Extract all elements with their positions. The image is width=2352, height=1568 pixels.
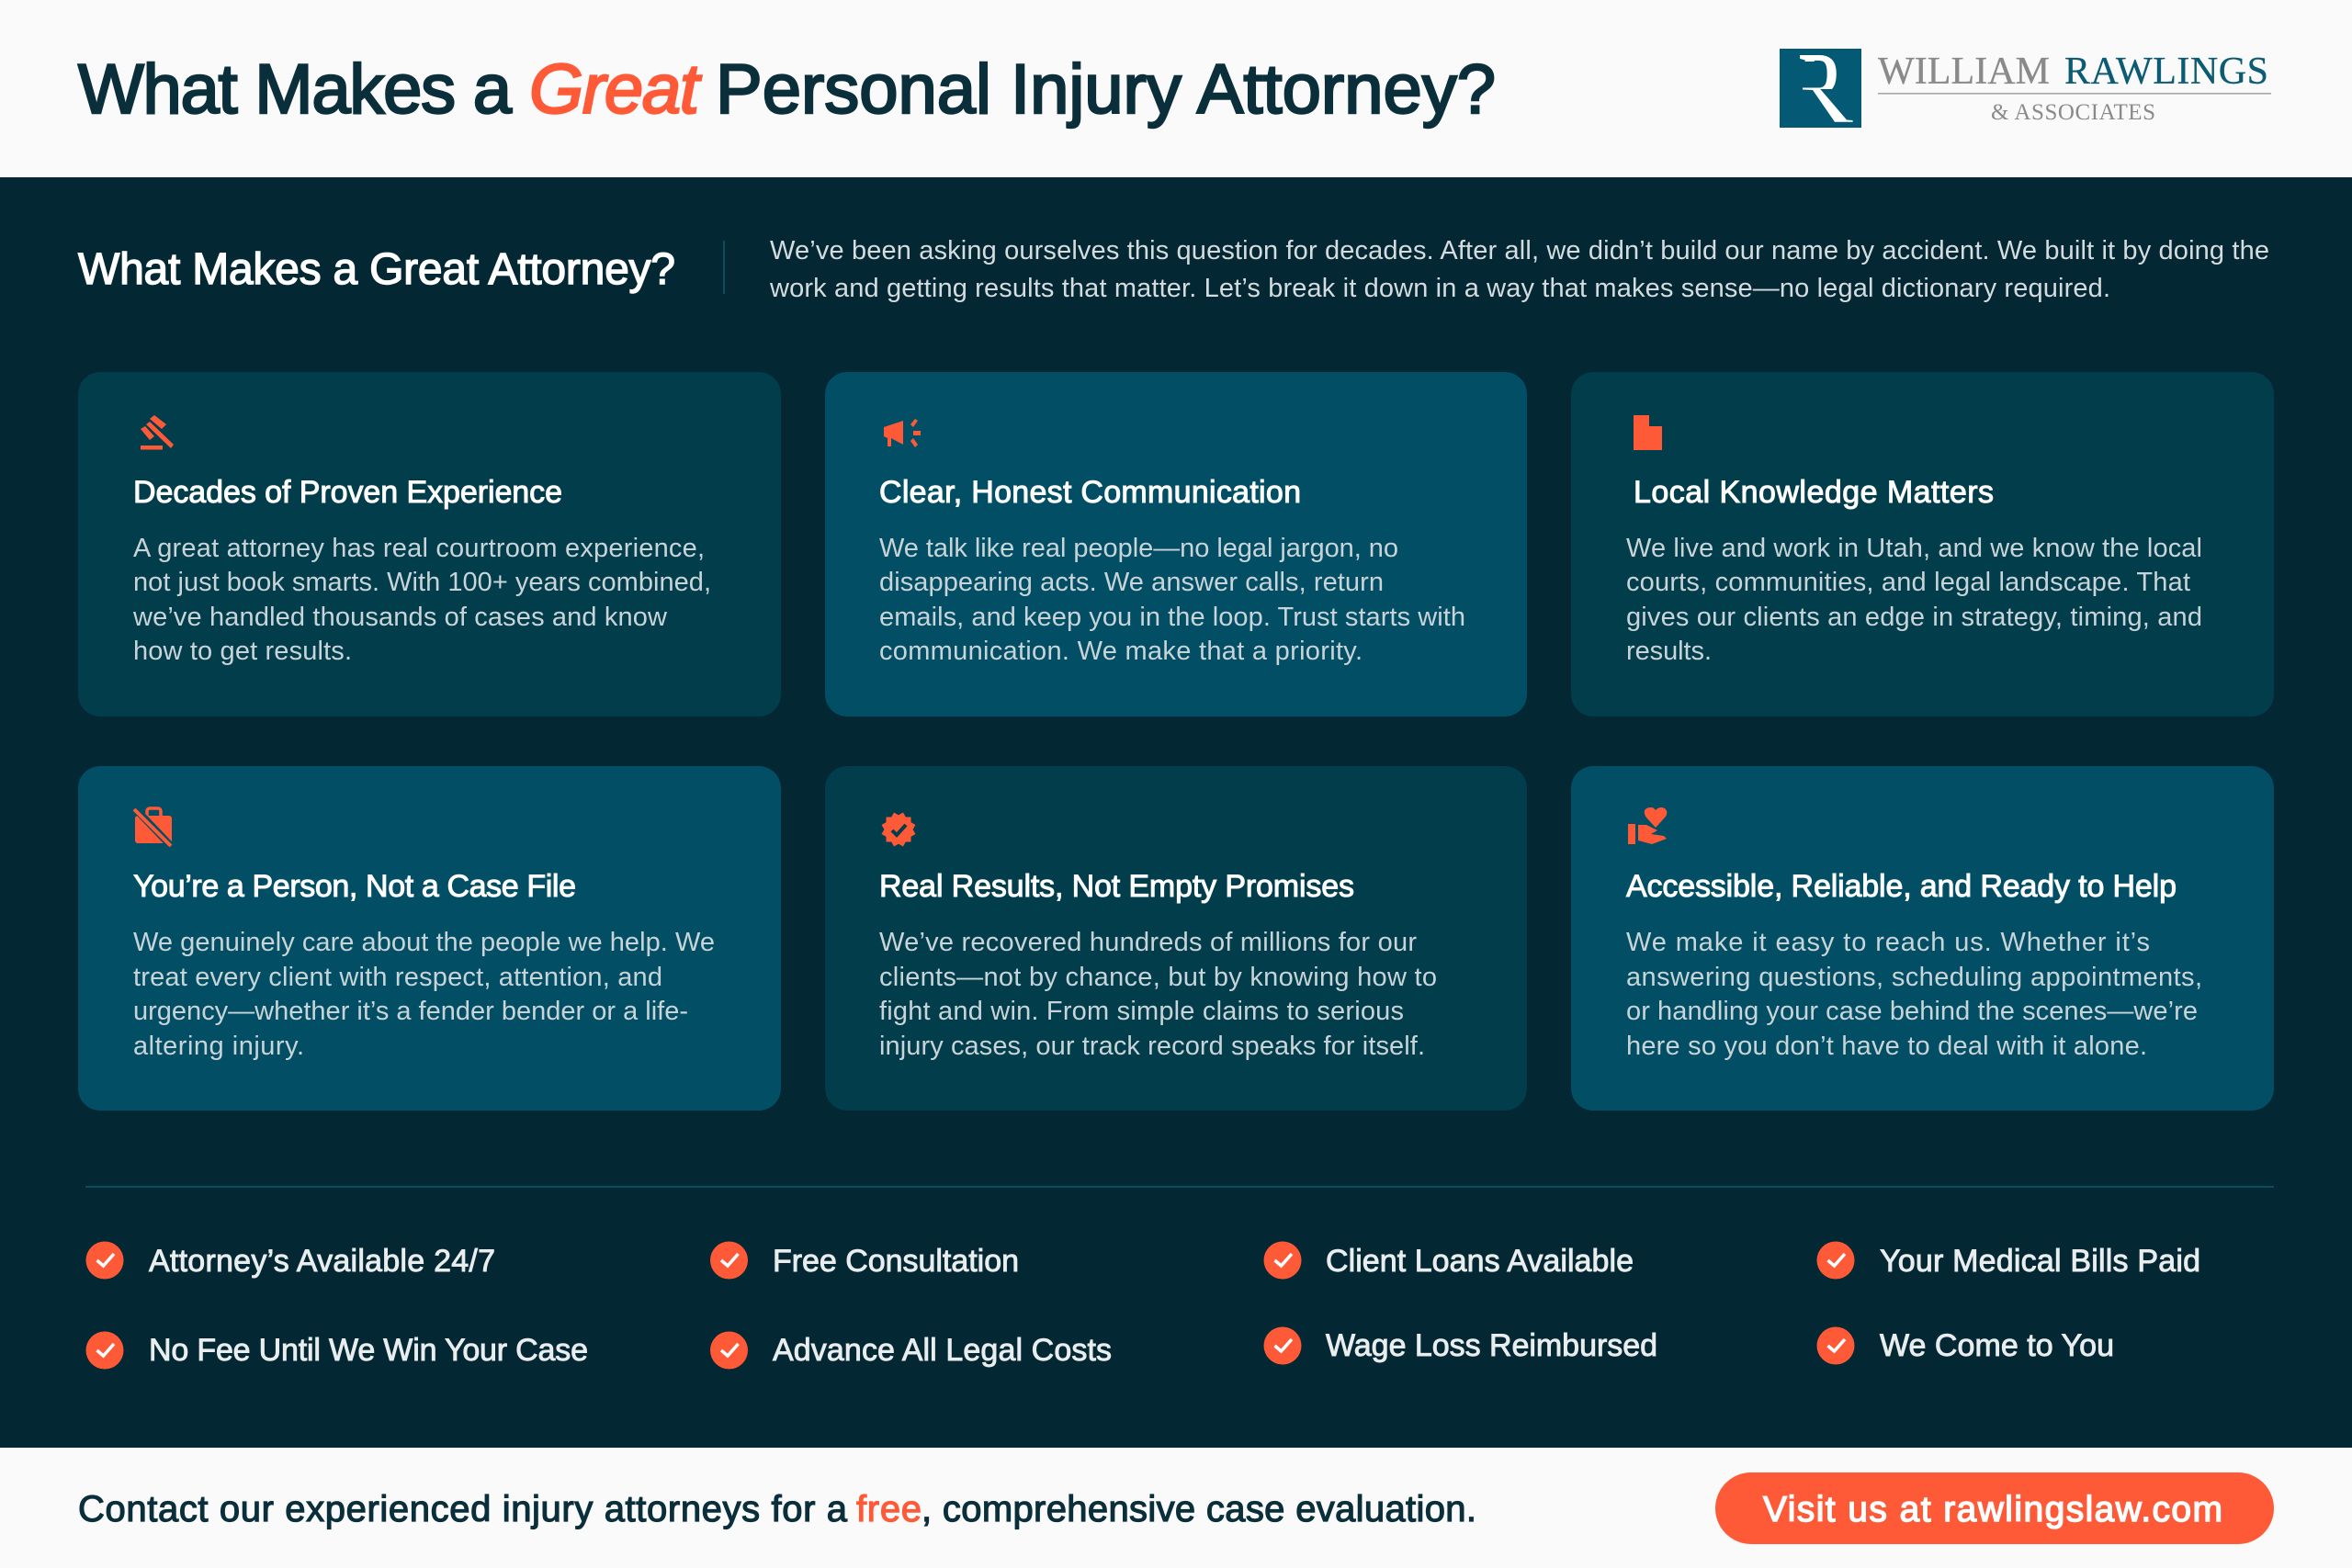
footer call to action text: free [856, 1489, 922, 1529]
panel: decades of proven experience [78, 372, 781, 716]
card body: A great attorney has real courtroom experience, [133, 534, 705, 563]
button: visit website [1715, 1472, 2274, 1544]
card body [1626, 928, 2202, 1061]
card body: or handling your case behind the scenes—we’re [1626, 997, 2198, 1026]
card body [879, 534, 1465, 666]
card body: We genuinely care about the people we help. We [133, 928, 715, 957]
panel: accessible, reliable, ready to help [1571, 766, 2274, 1111]
card body: We’ve recovered hundreds of millions for our [879, 928, 1417, 957]
panel: real results, not empty promises [825, 766, 1527, 1111]
checklist item: free consultation: Free Consultation [773, 1244, 1019, 1279]
icon: crossed briefcase [134, 807, 172, 847]
card body: communication. We make that a priority. [879, 637, 1363, 666]
card heading: Accessible, Reliable, and Ready to Help [1626, 869, 2177, 904]
section heading: What Makes a Great Attorney? [78, 245, 675, 294]
card body: we’ve handled thousands of cases and know [132, 603, 668, 632]
footer call to action text [78, 1489, 1476, 1529]
checklist item: we come to you: We Come to You [1880, 1328, 2114, 1363]
checklist item: medical bills: Your Medical Bills Paid [1880, 1244, 2200, 1279]
footer call to action text: Contact our experienced injury attorneys for a [78, 1489, 848, 1529]
card body: altering injury. [133, 1032, 304, 1061]
card body: courts, communities, and legal landscape. That [1626, 568, 2190, 597]
icon: hand holding heart [1628, 807, 1667, 844]
card body [132, 534, 711, 666]
intro paragraph: We’ve been asking ourselves this question for decades. After all, we didn’t build our name by accident. We built it by doing the [770, 236, 2269, 265]
card heading: You’re a Person, Not a Case File [133, 869, 576, 904]
card heading: Clear, Honest Communication [879, 475, 1301, 510]
logo mark [1780, 31, 1861, 143]
card body: answering questions, scheduling appointments, [1626, 963, 2202, 992]
logo mark: R [1799, 31, 1844, 143]
card body [133, 928, 715, 1061]
card body: gives our clients an edge in strategy, timing, and [1626, 603, 2202, 632]
card body: how to get results. [133, 637, 352, 666]
checklist item: advance costs: Advance All Legal Costs [773, 1333, 1112, 1368]
checklist item: attorneys available: Attorney’s Available 24/7 [149, 1244, 495, 1279]
intro paragraph: work and getting results that matter. Let’s break it down in a way that makes sense—no legal dictionary required. [769, 274, 2110, 303]
footer band [0, 1448, 2352, 1568]
logo rule [1878, 93, 2271, 95]
card body: fight and win. From simple claims to serious [879, 997, 1404, 1026]
card body: urgency—whether it’s a fender bender or a life- [133, 997, 688, 1026]
header band [0, 0, 2352, 177]
checklist item: client loans: Client Loans Available [1326, 1244, 1634, 1279]
footer call to action text: , comprehensive case evaluation. [922, 1489, 1476, 1529]
panel: you're a person, not a case file [78, 766, 781, 1111]
intro paragraph [769, 236, 2269, 303]
card body: clients—not by chance, but by knowing how to [879, 963, 1437, 992]
title: What Makes a [78, 51, 513, 129]
icon: gavel [141, 415, 174, 450]
icon: building [1634, 415, 1662, 450]
panel: clear, honest communication [825, 372, 1527, 716]
logo wordmark: WILLIAM [1878, 51, 2050, 93]
card body: We talk like real people—no legal jargon, no [879, 534, 1398, 563]
card body: disappearing acts. We answer calls, return [879, 568, 1384, 597]
title [78, 51, 1496, 129]
card body: here so you don’t have to deal with it alone. [1626, 1032, 2147, 1061]
icon: megaphone [884, 419, 921, 447]
card body: not just book smarts. With 100+ years combined, [133, 568, 711, 597]
checklist item: no fee: No Fee Until We Win Your Case [149, 1333, 588, 1368]
card heading: Real Results, Not Empty Promises [879, 869, 1354, 904]
icon: verified badge [882, 813, 915, 846]
logo subline: & ASSOCIATES [1991, 100, 2155, 125]
card body: We make it easy to reach us. Whether it’s [1626, 928, 2150, 957]
card body: injury cases, our track record speaks for itself. [879, 1032, 1425, 1061]
title: Great [529, 51, 702, 129]
card heading: Decades of Proven Experience [133, 475, 562, 510]
card heading: Local Knowledge Matters [1634, 475, 1994, 510]
logo: William Rawlings & Associates [1780, 31, 2271, 143]
card body: results. [1626, 637, 1712, 666]
card body: emails, and keep you in the loop. Trust starts with [879, 603, 1465, 632]
card body [879, 928, 1437, 1061]
checklist item: wage loss: Wage Loss Reimbursed [1326, 1328, 1657, 1363]
card body: We live and work in Utah, and we know the local [1626, 534, 2202, 563]
logo wordmark accent: RAWLINGS [2064, 51, 2268, 93]
card body [1626, 534, 2202, 666]
button: visit website: Visit us at rawlingslaw.com [1763, 1490, 2222, 1529]
card body: treat every client with respect, attention, and [133, 963, 662, 992]
panel: local knowledge matters [1571, 372, 2274, 716]
title: Personal Injury Attorney? [716, 51, 1496, 129]
